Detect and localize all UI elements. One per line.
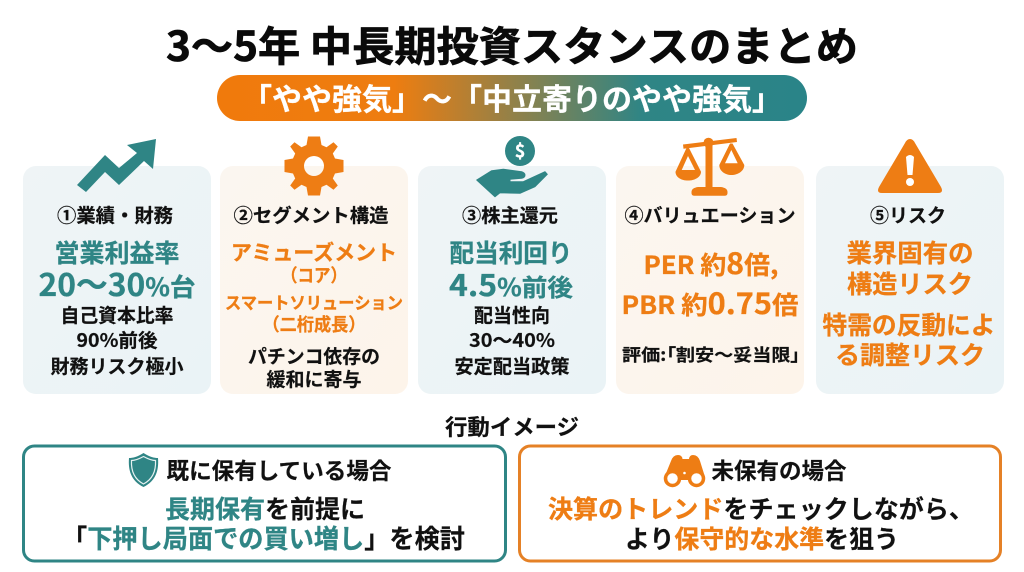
panel heading: ⑤リスク: [870, 201, 946, 228]
detail text: [454, 301, 570, 379]
highlight metric: 配当利回り: [450, 234, 572, 270]
icon: balance scale: [676, 138, 744, 196]
segment: amusement: アミューズメント: [231, 237, 397, 267]
segment: smart solution: [225, 289, 403, 337]
valuation metrics: [622, 241, 798, 323]
risk: demand reversal: る調整リスク: [835, 336, 985, 372]
icon: warning triangle: [878, 139, 942, 193]
icon: rising arrow: [77, 139, 156, 192]
highlight metric: 4.5%前後: [449, 261, 573, 305]
action text: 決算のトレンドをチェックしながら、: [548, 490, 974, 526]
highlight metric: 20〜30%台: [38, 260, 196, 305]
detail text: 緩和に寄与: [266, 365, 362, 392]
detail text: [248, 342, 380, 392]
panel heading: ③株主還元: [462, 201, 558, 228]
detail text: 安定配当政策: [454, 352, 570, 379]
risk: structural: [846, 234, 974, 301]
detail text: 90%前後: [76, 326, 158, 353]
valuation metrics: PER 約8倍,: [644, 241, 778, 283]
panel heading: 未保有の場合: [712, 454, 847, 486]
action text: 長期保有を前提に: [165, 490, 365, 526]
panel: バリュエーション: [616, 138, 804, 394]
action text: [62, 490, 465, 556]
panel: not holding: [520, 446, 1000, 561]
segment: amusement: （コア）: [281, 262, 347, 288]
detail text: 自己資本比率: [60, 301, 174, 328]
risk: structural: 構造リスク: [847, 265, 973, 301]
highlight metric: 営業利益率: [54, 234, 180, 270]
panel: 株主還元: [418, 136, 606, 394]
panel: 業績・財務: [23, 139, 211, 394]
highlight metric: [38, 234, 196, 305]
detail text: パチンコ依存の: [248, 342, 380, 369]
action text: [548, 490, 974, 556]
icon: coin over hand: $: [515, 138, 525, 164]
stance banner: 「やや強気」〜「中立寄りのやや強気」: [242, 75, 782, 119]
segment: amusement: [231, 237, 397, 288]
icon: binoculars: [664, 455, 705, 486]
risk: structural: 業界固有の: [846, 234, 974, 270]
panel: セグメント構造: [220, 136, 408, 394]
icon: gear: [284, 136, 344, 196]
evaluation note: 評価:「割安〜妥当限」: [622, 341, 800, 366]
section heading: 行動イメージ: [445, 410, 579, 442]
risk: demand reversal: 特需の反動によ: [822, 306, 996, 342]
icon: shield: [129, 453, 158, 487]
segment: smart solution: （二桁成長）: [262, 311, 366, 337]
detail text: [50, 301, 184, 379]
highlight metric: [449, 234, 573, 305]
valuation metrics: PBR 約0.75倍: [622, 281, 798, 323]
segment: smart solution: スマートソリューション: [225, 289, 403, 314]
detail text: 30〜40%: [469, 326, 555, 353]
panel: リスク: [816, 139, 1004, 394]
detail text: 財務リスク極小: [50, 352, 184, 379]
action text: より保守的な水準を狙う: [625, 520, 899, 556]
panel heading: ④バリュエーション: [624, 201, 796, 228]
detail text: 配当性向: [474, 301, 550, 328]
action text: 「下押し局面での買い増し」を検討: [62, 519, 465, 556]
panel: already holding: [24, 446, 506, 561]
risk: demand reversal: [822, 306, 996, 372]
panel heading: ②セグメント構造: [234, 201, 388, 228]
title: 3〜5年 中長期投資スタンスのまとめ: [166, 13, 858, 73]
panel heading: 既に保有している場合: [166, 454, 392, 486]
icon: coin over hand: [477, 136, 547, 197]
panel heading: ①業績・財務: [57, 201, 173, 228]
